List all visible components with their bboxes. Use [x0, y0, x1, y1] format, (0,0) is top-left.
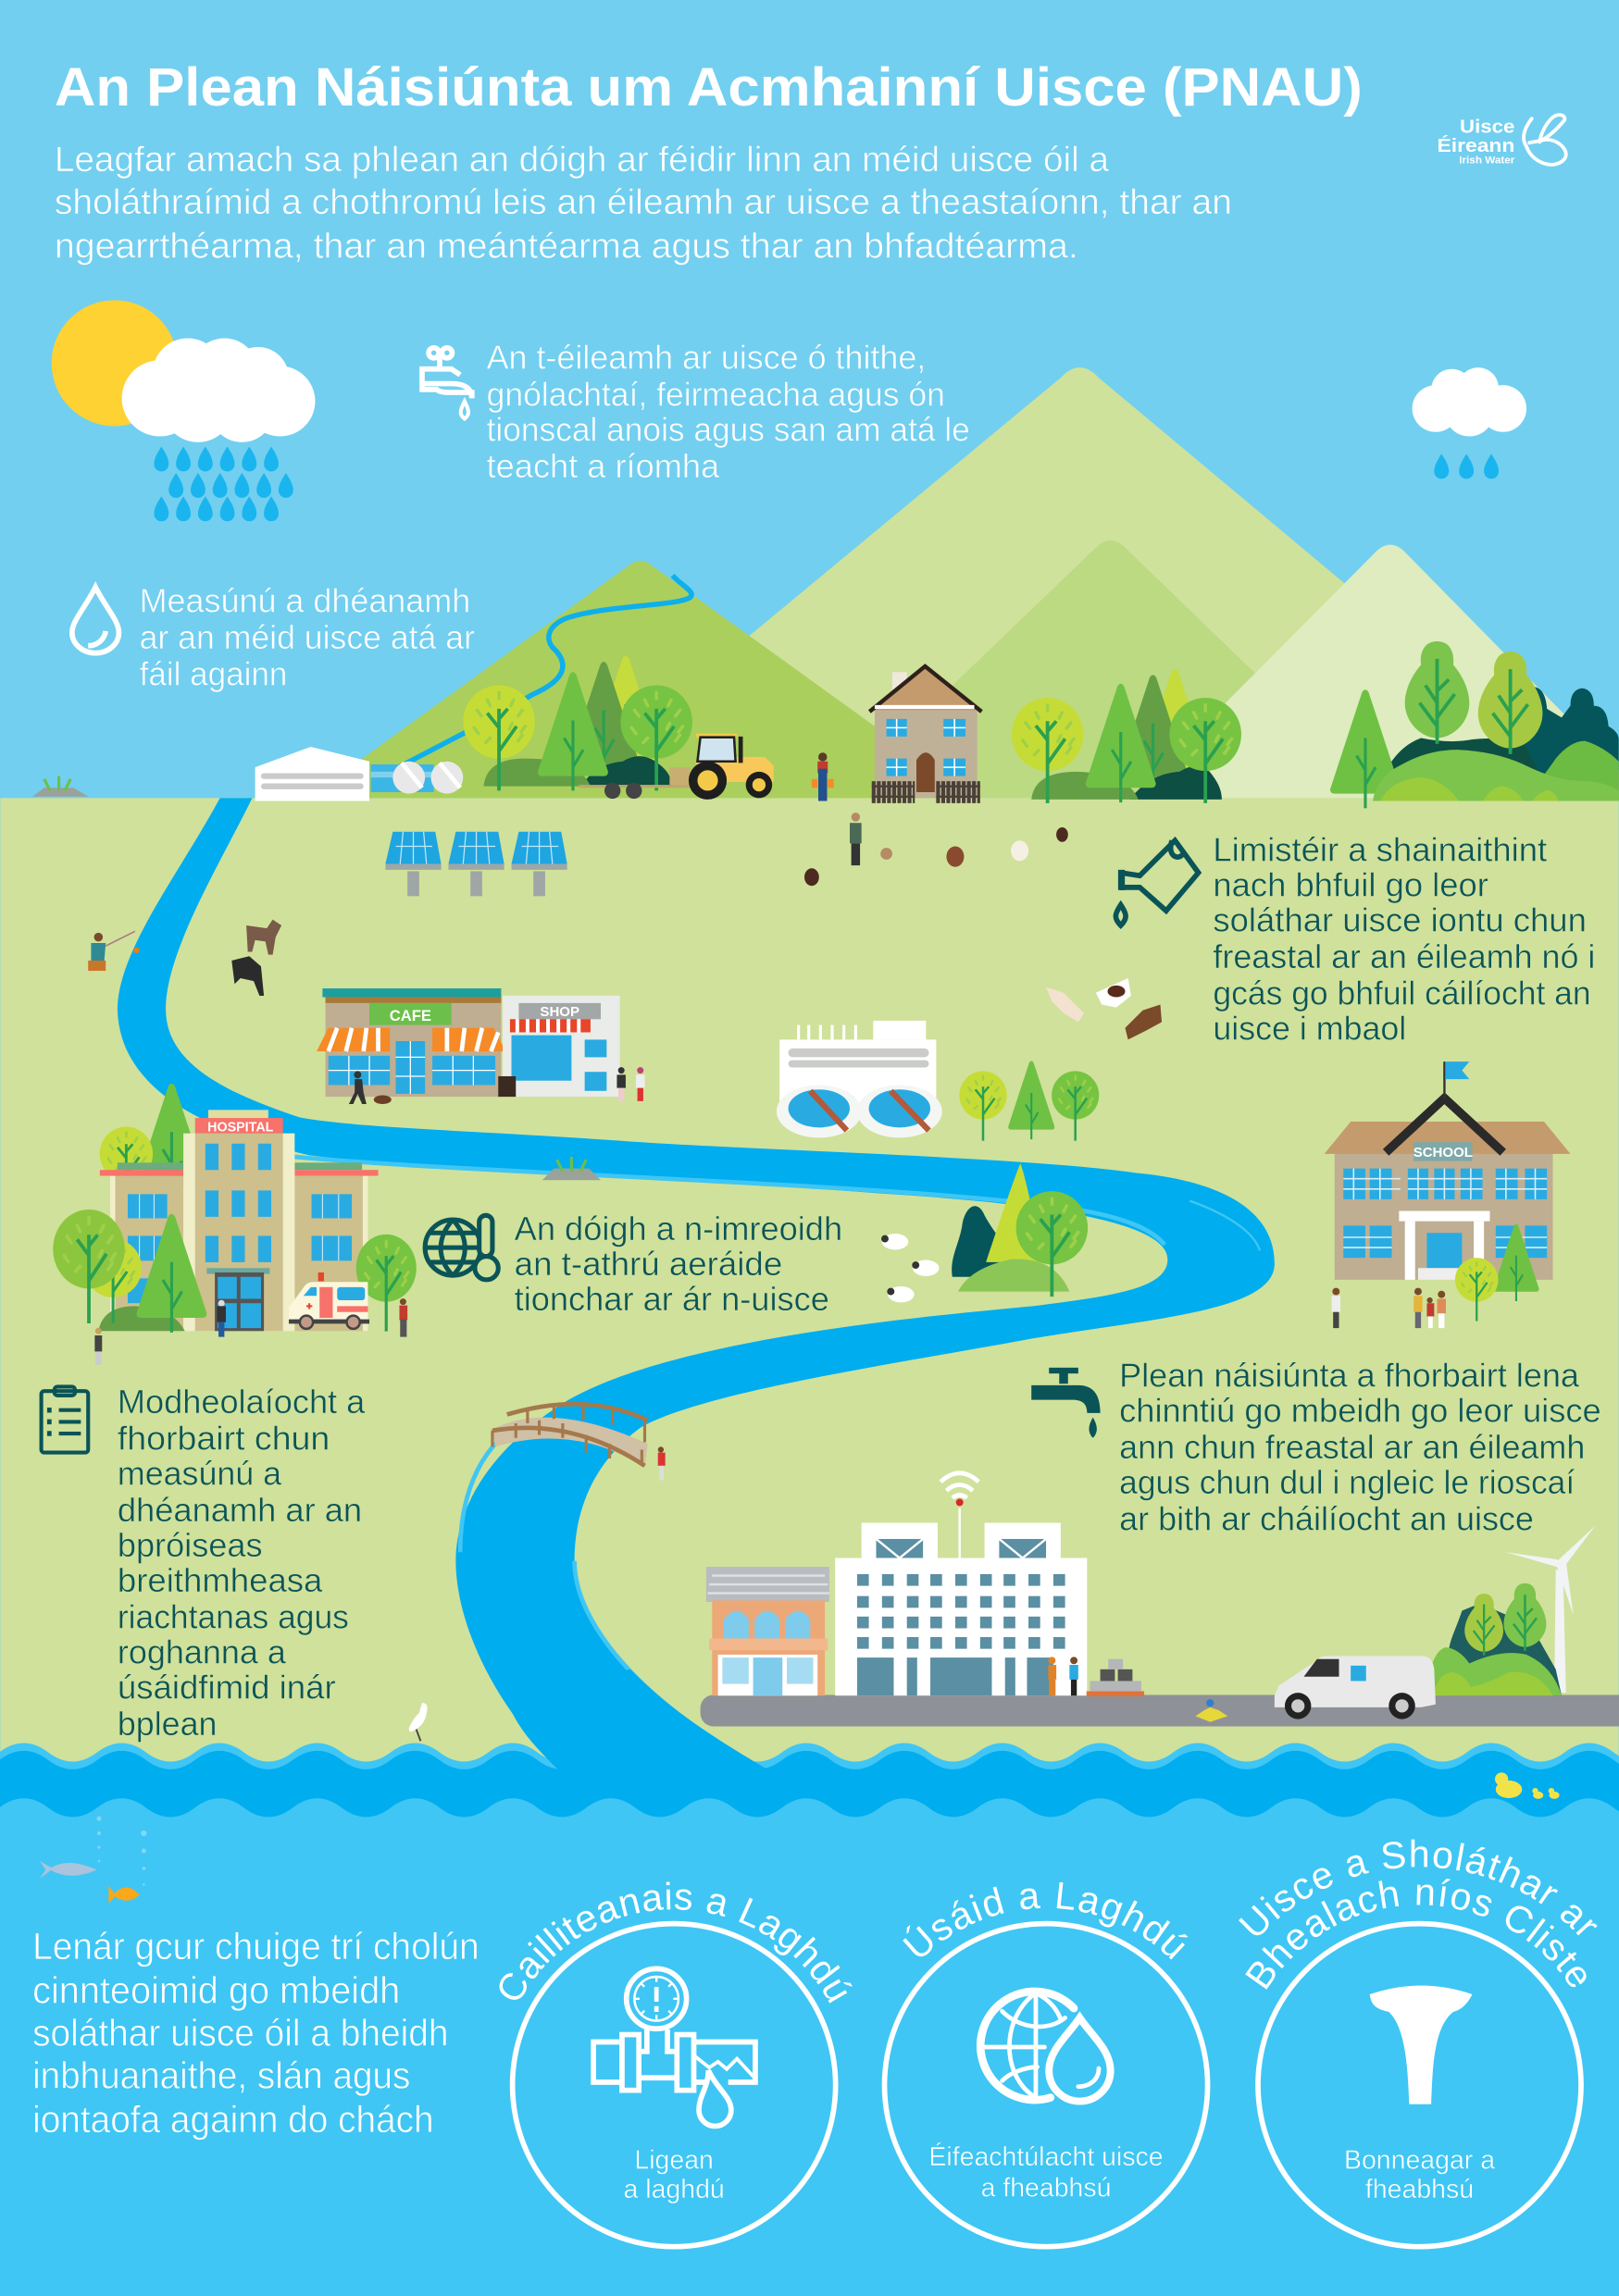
wind turbine [1506, 1526, 1595, 1693]
mountain: inner [835, 540, 1385, 798]
heading: Úsáid a Laghdú [903, 1882, 1189, 1960]
text: methodology: breithmheasa [118, 1561, 323, 1599]
text: national plan: chinntiú go mbeidh go leor uisce [1119, 1391, 1601, 1429]
text: methodology: fhorbairt chun [118, 1419, 330, 1457]
trees inside river bend [952, 1163, 1088, 1297]
tanks [392, 762, 425, 794]
cafe: CAFE [390, 1007, 431, 1024]
text: conclusion: soláthar uisce óil a bheidh [32, 2011, 448, 2054]
dark bush [581, 756, 673, 787]
mountain: pale right [1131, 545, 1619, 798]
text: methodology: dhéanamh ar an [118, 1491, 362, 1529]
text: national plan: agus chun dul i ngleic le rioscaí [1119, 1463, 1575, 1501]
bush and front conifer [98, 1306, 185, 1331]
people at school [1332, 1288, 1446, 1328]
dark conifer [568, 662, 639, 780]
text: conclusion: iontaofa againn do chách [32, 2098, 434, 2141]
text: national plan [1119, 1356, 1601, 1537]
heading line 2: Bhealach níos Cliste [1245, 1879, 1587, 1990]
building [255, 747, 369, 801]
awnings [317, 1028, 390, 1051]
left trees [84, 1239, 142, 1323]
icon: globe with drop [980, 1992, 1111, 2102]
tractor with trailer [579, 734, 774, 800]
van [1275, 1657, 1436, 1719]
text: climate change [515, 1210, 842, 1318]
pedestrians at shops [349, 1067, 644, 1104]
icon: white water drop [72, 587, 118, 653]
heading line 1: Uisce a Sholáthar ar [1239, 1840, 1598, 1936]
icon: white tap [422, 348, 472, 419]
windows [128, 1144, 352, 1303]
lime conifer [591, 656, 661, 775]
text: limitations: Limistéir a shainaithint [1213, 830, 1547, 868]
conifer [1330, 689, 1401, 808]
logo: Uisce Éireann Irish Water: Uisce [1460, 116, 1514, 137]
windows [329, 1041, 495, 1094]
lower water [0, 1798, 1619, 2296]
text: conclusion [32, 1925, 479, 2141]
pillar: reduce leakage [499, 1882, 853, 2249]
icon: globe with thermometer [425, 1215, 498, 1280]
title: An Plean Náisiúnta um Acmhainní Uisce (PNAU) [55, 57, 1363, 118]
portico [1399, 1211, 1489, 1222]
text: assessment [140, 581, 475, 693]
person on bank [658, 1446, 666, 1481]
river mouth [505, 1669, 777, 1775]
text: methodology: measúnú a [118, 1454, 282, 1492]
farmer near house [812, 752, 834, 801]
pillar: supply water more smartly [1239, 1840, 1598, 2249]
ducks [1495, 1772, 1560, 1799]
text: methodology: úsáidfimid inár [118, 1668, 336, 1706]
text: climate change: An dóigh a n-imreoidh [515, 1210, 842, 1247]
icon: dark tap [1031, 1368, 1101, 1438]
pallets [1087, 1659, 1144, 1696]
text: climate change: tionchar ar ár n-uisce [515, 1280, 829, 1318]
settling tanks [777, 1085, 862, 1137]
cows [1046, 978, 1162, 1039]
hospital: HOSPITAL [207, 1119, 273, 1135]
tower [183, 1134, 294, 1331]
sign [1414, 1142, 1472, 1161]
icon: funnel [1370, 1986, 1472, 2104]
trees [1493, 1224, 1539, 1301]
caption: Ligean [634, 2145, 714, 2175]
small cloud with drops [1413, 367, 1526, 478]
pale hill patches [1380, 777, 1559, 801]
text: assessment: ar an méid uisce atá ar [140, 618, 475, 656]
text: conclusion: cinnteoimid go mbeidh [32, 1969, 400, 2012]
pillar: supply water more smartly: fheabhsú [1365, 2175, 1474, 2204]
bubbles [96, 1817, 147, 1886]
trees behind van [1426, 1583, 1562, 1695]
sun [52, 300, 178, 426]
caption: Bonneagar a [1344, 2145, 1495, 2175]
windows [1343, 1169, 1547, 1258]
road [701, 1694, 1619, 1726]
office building [835, 1523, 1087, 1695]
upper water band [0, 1751, 1619, 1831]
text: climate change: an t-athrú aeráide [515, 1245, 782, 1283]
river highlights [252, 1152, 1260, 1751]
text: conclusion: Lenár gcur chuige trí cholún [32, 1925, 479, 1967]
horses [231, 920, 281, 996]
roadside worker [1195, 1699, 1227, 1722]
door [916, 752, 935, 792]
fish and bubbles [40, 1817, 147, 1904]
intro paragraph [55, 141, 1232, 266]
sun and rain cloud [52, 300, 315, 521]
pillar: reduce use [881, 1882, 1211, 2249]
people at hospital [94, 1298, 407, 1365]
green bush [483, 759, 591, 787]
brick building [706, 1567, 829, 1695]
gable [1386, 1098, 1503, 1152]
sky background [0, 0, 1619, 820]
mountain: large back [616, 367, 1601, 798]
front conifer [538, 672, 608, 790]
text: demand: tionscal anois agus san am atá le [487, 410, 970, 448]
shoreline wave outline [0, 1743, 1619, 1831]
text: demand [487, 339, 970, 485]
text: limitations: soláthar uisce iontu chun [1213, 900, 1587, 938]
roof [1325, 1122, 1570, 1154]
fence [872, 786, 980, 800]
text: national plan: ann chun freastal ar an éileamh [1119, 1428, 1585, 1466]
heron [409, 1703, 428, 1741]
farmer with hens [804, 813, 1068, 886]
window grid [857, 1574, 1065, 1695]
arched windows [724, 1610, 810, 1639]
mountain: front [308, 561, 975, 798]
dark hill [1374, 738, 1553, 800]
logo: Uisce Éireann Irish Water [1438, 115, 1566, 167]
caption: Éifeachtúlacht uisce [928, 2142, 1164, 2172]
icon: watering can [1115, 840, 1199, 925]
lime tree [463, 686, 535, 790]
text: demand: gnólachtaí, feirmeacha agus ón [487, 375, 945, 413]
text: limitations: nach bhfuil go leor [1213, 865, 1488, 903]
heading: Cailliteanais a Laghdú [499, 1882, 853, 2004]
windows [887, 719, 965, 776]
school: SCHOOL [1414, 1145, 1473, 1160]
intro paragraph: ngearrthéarma, thar an meántéarma agus thar an bhfadtéarma. [55, 227, 1078, 266]
icon: pipe gauge and leak [593, 1968, 755, 2126]
text: assessment: fáil againn [140, 655, 287, 693]
sign [195, 1118, 283, 1134]
text: conclusion: inbhuanaithe, slán agus [32, 2054, 410, 2096]
pillar: reduce leakage: a laghdú [624, 2175, 725, 2204]
tall green tree [1405, 641, 1469, 744]
text: limitations: freastal ar an éileamh nó i [1213, 937, 1595, 975]
text: methodology: bplean [118, 1705, 217, 1743]
green hill [1373, 750, 1619, 801]
roof [870, 666, 980, 710]
hill-side trees left group [463, 656, 692, 790]
woodland at far right [1330, 641, 1619, 808]
intro paragraph: sholáthraímid a chothromú leis an éileamh ar uisce a theastaíonn, thar an [55, 183, 1232, 222]
logo: Uisce Éireann Irish Water: Irish Water [1459, 155, 1515, 167]
shop: SHOP [540, 1004, 579, 1020]
pillar: reduce use: a fheabhsú [981, 2173, 1111, 2203]
green tree [620, 686, 692, 790]
text: national plan: Plean náisiúnta a fhorbairt lena [1119, 1356, 1580, 1394]
text: demand: An t-éileamh ar uisce ó thithe, [487, 339, 926, 377]
text: limitations: uisce i mbaol [1213, 1009, 1406, 1047]
wifi mast [940, 1473, 978, 1558]
ring [885, 1924, 1208, 2247]
school [1325, 1061, 1570, 1322]
goldfish [108, 1886, 140, 1904]
bridge [492, 1404, 648, 1467]
grey fish [40, 1861, 97, 1879]
water treatment works [777, 1021, 942, 1137]
reservoir plant [255, 747, 463, 801]
text: methodology: riachtanas agus [118, 1597, 349, 1635]
logo: Uisce Éireann Irish Water: Éireann [1438, 135, 1514, 156]
icon: clipboard [42, 1386, 88, 1453]
sheep [881, 1234, 940, 1302]
wings [110, 1176, 183, 1331]
text: methodology [118, 1383, 366, 1743]
hens [804, 827, 1068, 886]
mountain stream [392, 576, 691, 770]
workers [1048, 1657, 1078, 1695]
grass tuft with rock [32, 776, 88, 797]
text: limitations [1213, 830, 1595, 1047]
text: methodology: Modheolaíocht a [118, 1383, 366, 1421]
trees right of house [1012, 669, 1241, 803]
back lime tree [100, 1127, 153, 1205]
door [206, 1268, 269, 1274]
ring [513, 1924, 836, 2247]
back right hill [1524, 741, 1619, 801]
text: assessment: Measúnú a dhéanamh [140, 581, 470, 619]
farmhouse [869, 666, 981, 798]
hospital [53, 1084, 417, 1333]
cloud [122, 339, 315, 442]
flag [1443, 1061, 1445, 1098]
solar panels [385, 832, 567, 896]
fisherman [88, 931, 140, 971]
text: methodology: bpróiseas [118, 1526, 263, 1564]
cafe [317, 988, 505, 1097]
text: national plan: ar bith ar cháilíocht an uisce [1119, 1499, 1534, 1537]
right tree [356, 1235, 417, 1332]
shop [498, 996, 620, 1097]
lime-green tree [1478, 652, 1542, 754]
ambulance [289, 1272, 369, 1329]
dark teal trees [1509, 687, 1619, 800]
main river [118, 798, 1275, 1769]
text: demand: teacht a ríomha [487, 447, 720, 485]
ground background [0, 798, 1619, 1793]
grass tuft on river bank [542, 1157, 601, 1180]
back conifer [136, 1084, 206, 1202]
text: methodology: roghanna a [118, 1632, 287, 1670]
text: limitations: gcás go bhfuil cáilíocht an [1213, 974, 1591, 1011]
intro paragraph: Leagfar amach sa phlean an dóigh ar féidir linn an méid uisce óil a [55, 141, 1110, 180]
raindrops [154, 447, 293, 521]
ring [1258, 1924, 1581, 2247]
trees beside treatment works [959, 1061, 1099, 1141]
sign [369, 1003, 452, 1025]
